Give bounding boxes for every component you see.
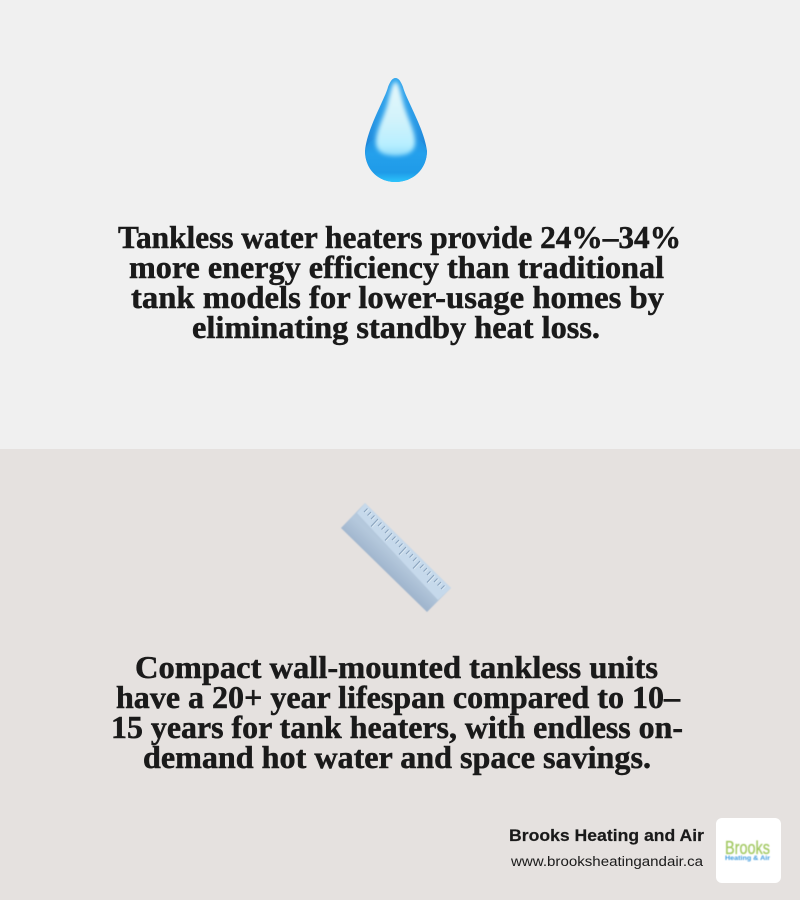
icon: water drop — [365, 78, 427, 182]
heading: energy efficiency statement: Tankless water heaters provide 24%–34% — [118, 219, 681, 255]
heading: lifespan statement: 15 years for tank heaters, with endless on- — [111, 709, 683, 745]
heading: energy efficiency statement: eliminating standby heat loss. — [192, 309, 600, 345]
logo: Brooks badge — [716, 818, 781, 883]
heading: energy efficiency statement: tank models for lower-usage homes by — [131, 279, 664, 315]
heading: lifespan statement — [111, 649, 683, 775]
panel: bottom background — [0, 449, 800, 900]
heading: energy efficiency statement: more energy efficiency than traditional — [129, 249, 664, 285]
heading: lifespan statement: demand hot water and space savings. — [143, 739, 651, 775]
logo: Brooks badge: Brooks — [725, 838, 770, 858]
panel: top background — [0, 0, 800, 449]
footer: website: www.brooksheatingandair.ca — [510, 854, 704, 869]
icon: ruler — [341, 503, 451, 612]
logo: Brooks badge: Heating & Air — [725, 855, 771, 862]
heading: lifespan statement: have a 20+ year lifespan compared to 10– — [116, 679, 681, 715]
heading: lifespan statement: Compact wall-mounted tankless units — [135, 649, 658, 685]
heading: energy efficiency statement — [118, 219, 681, 345]
footer: company name: Brooks Heating and Air — [509, 827, 705, 845]
